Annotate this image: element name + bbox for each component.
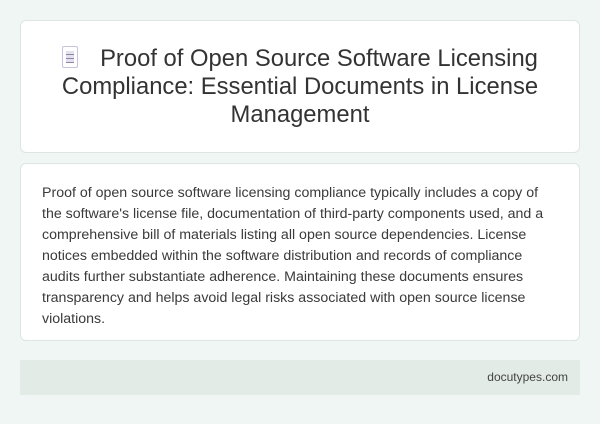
title: Proof of Open Source Software Licensing Compliance: Essential Documents in License Management — [62, 45, 538, 128]
panel: description — [20, 163, 580, 341]
panel: title — [20, 20, 580, 153]
footer text: docutypes.com — [487, 370, 568, 384]
footer — [20, 360, 580, 395]
icon: document — [62, 46, 78, 68]
text block: Proof of open source software licensing compliance typically includes a copy of the software's license file, documentation of third-party components used, and a comprehensive bill of materials listing all open source dependencies. License notices embedded within the software distribution and records of compliance audits further substantiate adherence. Maintaining these documents ensures transparency and helps avoid legal risks associated with open source license violations. — [42, 185, 543, 327]
